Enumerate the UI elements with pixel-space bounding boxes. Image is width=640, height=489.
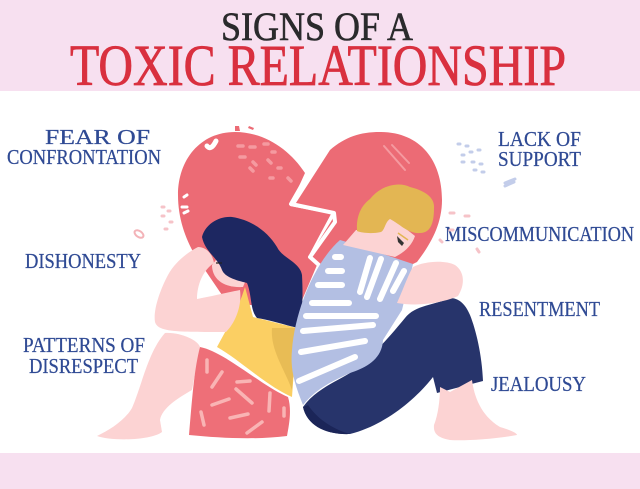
broken heart (178, 126, 442, 305)
label: fear of confrontation (7, 125, 161, 169)
label: fear of confrontation: FEAR OF (45, 125, 150, 149)
label: resentment: RESENTMENT (479, 297, 600, 321)
man eyebrow (398, 233, 408, 240)
label: patterns of disrespect (23, 333, 145, 378)
woman top (217, 287, 297, 397)
woman eye (216, 262, 222, 264)
label: lack of support (498, 127, 581, 171)
label: lack of support: SUPPORT (498, 147, 581, 171)
man shirt (292, 240, 413, 405)
header band (0, 0, 640, 91)
woman shorts (189, 347, 290, 438)
man hair (357, 184, 434, 233)
label: patterns of disrespect: DISRESPECT (29, 354, 138, 378)
man foot (434, 380, 517, 440)
man face (343, 216, 415, 257)
trousers shadow (303, 405, 350, 434)
woman hair (202, 217, 303, 328)
woman (97, 217, 303, 439)
label: lack of support: LACK OF (498, 127, 581, 151)
decorative dots (133, 144, 515, 252)
label: fear of confrontation: CONFRONTATION (7, 145, 161, 169)
man eye (397, 236, 404, 246)
man (292, 184, 517, 440)
title line 1: SIGNS OF A (221, 4, 413, 49)
label: dishonesty: DISHONESTY (25, 249, 141, 273)
woman arm (155, 247, 240, 332)
label: jealousy: JEALOUSY (491, 372, 586, 396)
shirt stripes (299, 257, 404, 381)
man arm (397, 262, 463, 304)
man trousers (303, 298, 483, 434)
footer band (0, 453, 640, 489)
woman face (212, 255, 250, 287)
label: patterns of disrespect: PATTERNS OF (23, 333, 145, 357)
woman legs (97, 333, 200, 439)
